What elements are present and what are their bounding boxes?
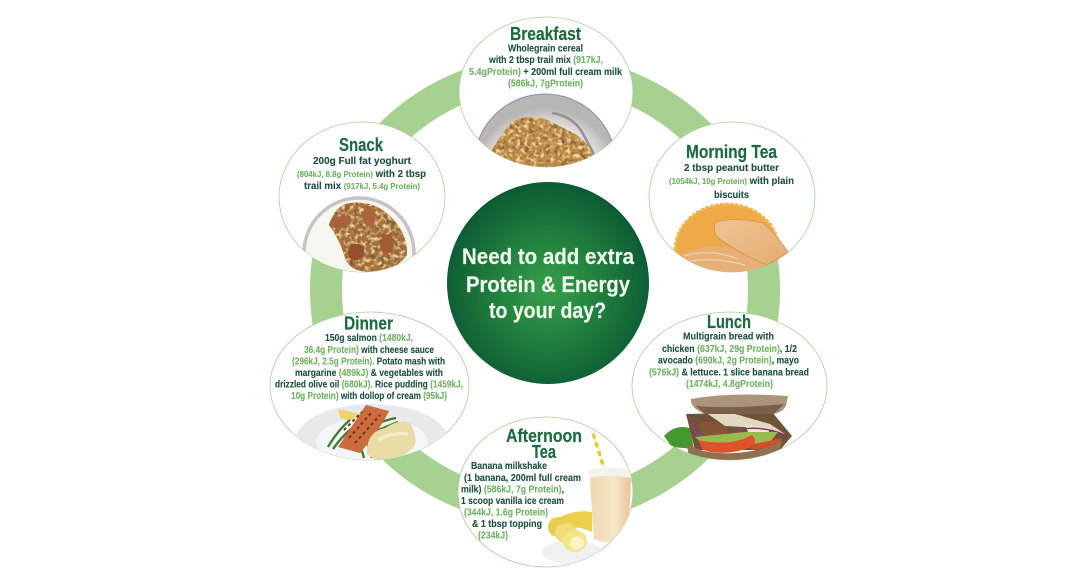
photo: cereal bowl — [478, 94, 612, 167]
text block: (296kJ, 2.5g Protein). Potato mash with — [292, 356, 445, 368]
text block: 10g Protein) with dollop of cream (95kJ) — [291, 390, 447, 402]
text block — [275, 332, 463, 402]
heading: Dinner — [344, 312, 393, 334]
text block: 200g Full fat yoghurt — [313, 155, 411, 167]
text block — [469, 42, 622, 90]
panel: lunch — [632, 311, 827, 463]
text block: (1054kJ, 10g Protein) with plain — [669, 175, 794, 187]
text block: 150g salmon (1480kJ, — [325, 332, 413, 344]
photo: salmon plate — [296, 404, 446, 460]
text block: 1 scoop vanilla ice cream — [461, 495, 564, 507]
text block: & 1 tbsp topping — [472, 518, 542, 530]
text block: 2 tbsp peanut butter — [684, 162, 779, 174]
text block: 5.4gProtein) + 200ml full cream milk — [469, 66, 622, 78]
text block: Multigrain bread with — [683, 330, 774, 342]
panel: snack — [278, 122, 446, 272]
panel: morning tea — [648, 122, 816, 272]
text block: 36.4g Protein) with cheese sauce — [304, 344, 434, 356]
heading: Afternoon — [506, 425, 582, 446]
photo: biscuit with peanut butter — [674, 202, 788, 272]
text block: (1474kJ, 4.8gProtein) — [686, 378, 773, 390]
photo: sandwich — [664, 395, 792, 463]
text block: (1 banana, 200ml full cream — [464, 472, 581, 484]
background ring — [326, 71, 764, 509]
panel: afternoon tea — [458, 417, 633, 567]
text block: Banana milkshake — [471, 460, 547, 472]
text block: with 2 tbsp trail mix (917kJ, — [488, 54, 603, 66]
text block — [461, 460, 581, 542]
central question text: Need to add extra — [462, 244, 634, 269]
text block — [669, 162, 794, 201]
text block: (586kJ, 7gProtein) — [508, 78, 583, 90]
text block: milk) (586kJ, 7g Protein), — [461, 484, 564, 496]
text block — [649, 330, 809, 390]
text block: (576kJ) & lettuce. 1 slice banana bread — [649, 366, 809, 378]
central question text: Protein & Energy — [466, 272, 630, 297]
text block: trail mix (917kJ, 5.4g Protein) — [304, 180, 420, 192]
text block: chicken (637kJ, 29g Protein), 1/2 — [662, 343, 797, 355]
heading: Snack — [339, 134, 384, 155]
text block: biscuits — [714, 189, 749, 201]
heading — [506, 425, 582, 462]
central circle: question — [447, 182, 649, 384]
text block: (804kJ, 8.8g Protein) with 2 tbsp — [297, 168, 426, 180]
text block: margarine (489kJ) & vegetables with — [295, 367, 443, 379]
central question text — [462, 244, 634, 323]
text block: (344kJ, 1.6g Protein) — [464, 506, 548, 518]
heading: Tea — [532, 441, 557, 462]
photo: banana milkshake — [542, 430, 632, 564]
text block — [297, 155, 426, 192]
text block: avocado (690kJ, 2g Protein), mayo — [658, 354, 799, 366]
heading: Lunch — [707, 311, 751, 332]
text block: (234kJ) — [478, 530, 508, 542]
panel: dinner — [270, 312, 469, 476]
central question text: to your day? — [489, 298, 606, 323]
panel: breakfast — [459, 16, 633, 168]
photo: yoghurt with trail mix — [302, 196, 416, 272]
heading: Breakfast — [510, 23, 581, 44]
text block: Wholegrain cereal — [508, 42, 583, 54]
heading: Morning Tea — [686, 141, 778, 162]
text block: drizzled olive oil (680kJ). Rice pudding (1459kJ, — [275, 378, 463, 390]
